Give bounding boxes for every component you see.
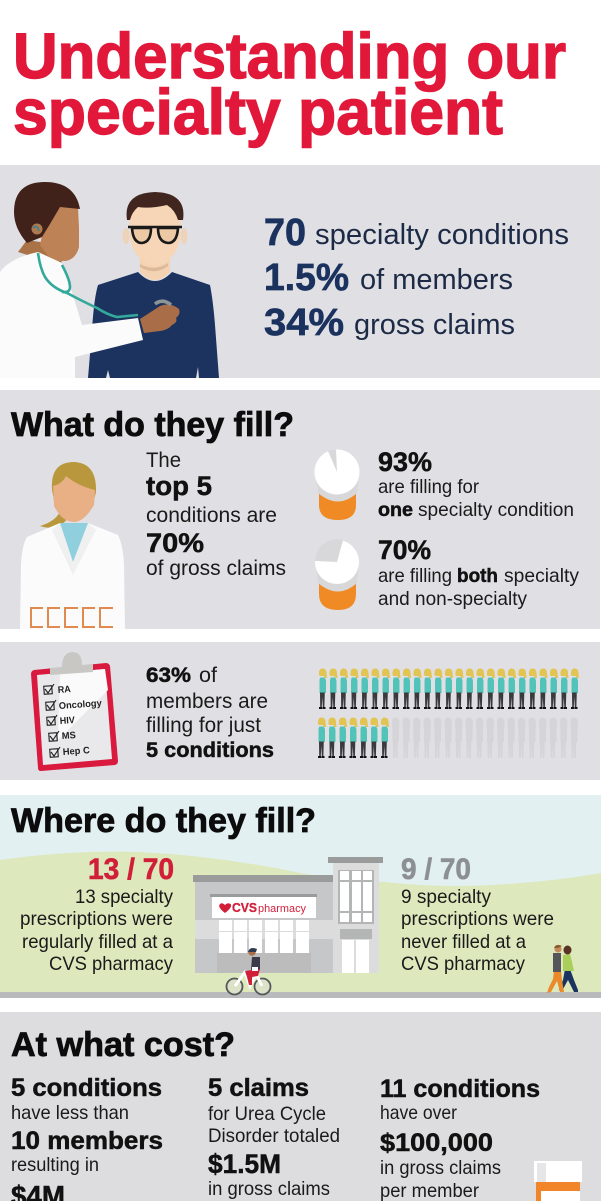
stat 13/70: prescriptions were: [20, 908, 173, 930]
stat 93%: one: [378, 499, 413, 521]
stats text: 1.5%: [264, 257, 349, 299]
top 5 text: of gross claims: [146, 557, 286, 580]
icon: doctor: [0, 182, 180, 378]
icon: clipboard checklist: [31, 652, 118, 771]
stat 13/70: 13 specialty: [75, 886, 173, 908]
panel: where do they fill: [0, 795, 601, 998]
stat 93%: [378, 447, 574, 521]
stat 70%: both: [457, 565, 498, 587]
top 5 text: top 5: [146, 471, 212, 501]
icon: clipboard checklist: Hep C: [62, 745, 90, 758]
column: 11 conditions: in gross claims: [380, 1157, 501, 1179]
63% text: members are: [146, 690, 268, 713]
icon: clipboard checklist: HIV: [59, 715, 76, 727]
column: 5 conditions: 5 conditions: [11, 1074, 162, 1102]
stat 9/70: CVS pharmacy: [401, 953, 525, 975]
title: Understanding our: [13, 20, 566, 92]
stats text: gross claims: [354, 309, 515, 341]
top 5 text: 70%: [146, 528, 204, 558]
column: 5 conditions: 10 members: [11, 1127, 163, 1155]
icon: pill bottle 70%: [315, 539, 359, 610]
stat 9/70: prescriptions were: [401, 908, 554, 930]
stat 13/70: [20, 853, 174, 975]
icon: pill bottle: [534, 1161, 582, 1201]
icon: CVS pharmacy store: pharmacy: [258, 903, 306, 915]
column: 5 claims: for Urea Cycle: [208, 1103, 326, 1125]
panel: patient overview: [0, 165, 600, 378]
icon: walking couple: [547, 945, 578, 993]
stat 70%: 70%: [378, 535, 431, 565]
chart: row of 25 people, all filled: [319, 668, 579, 709]
63% text: 63%: [146, 663, 191, 687]
stat 13/70: CVS pharmacy: [49, 953, 173, 975]
title: [13, 20, 566, 148]
stats text: specialty conditions: [315, 219, 569, 251]
stat 70%: are filling: [378, 565, 452, 587]
column: 5 conditions: resulting in: [11, 1154, 99, 1176]
63% text: filling for just: [146, 714, 261, 737]
icon: cyclist: [226, 948, 270, 994]
column: 5 conditions: [11, 1074, 163, 1201]
chart: row of 25 people, 7 filled: [318, 718, 578, 758]
column: 5 claims: 5 claims: [208, 1074, 309, 1102]
63% text: [146, 663, 274, 762]
icon: pill bottle 93%: [314, 450, 360, 520]
stats text: 70: [264, 212, 306, 254]
stat 9/70: never filled at a: [401, 931, 526, 953]
stat 70%: specialty: [504, 565, 579, 587]
column: 5 claims: in gross claims: [208, 1178, 330, 1200]
icon: clipboard checklist: MS: [61, 730, 76, 742]
63% text: 5 conditions: [146, 738, 274, 762]
column: 5 claims: Disorder totaled: [208, 1125, 340, 1147]
column: 5 claims: [208, 1074, 340, 1200]
stat 93%: are filling for: [378, 476, 479, 498]
icon: CVS pharmacy store: CVS: [232, 900, 257, 915]
column: 11 conditions: have over: [380, 1102, 457, 1124]
stat 13/70: regularly filled at a: [22, 931, 173, 953]
title: specialty patient: [13, 76, 503, 148]
heading: Where do they fill?: [11, 802, 316, 840]
stat 93%: specialty condition: [418, 499, 574, 521]
panel: 63% of members: [0, 642, 600, 780]
icon: patient: [88, 192, 219, 378]
63% text: of: [199, 664, 217, 687]
icon: clipboard checklist: Oncology: [58, 698, 103, 712]
column: 5 claims: $1.5M: [208, 1149, 281, 1179]
heading: What do they fill?: [11, 406, 294, 444]
panel: what do they fill: [0, 390, 600, 629]
stat 9/70: 9 / 70: [401, 853, 471, 886]
stats text: of members: [360, 264, 513, 296]
icon: clipboard checklist: RA: [57, 684, 71, 696]
stat 9/70: [401, 853, 554, 975]
stats text: 34%: [264, 302, 344, 344]
column: 5 conditions: have less than: [11, 1102, 129, 1124]
stat 70%: and non-specialty: [378, 588, 527, 610]
stats text: [264, 212, 569, 344]
column: 11 conditions: 11 conditions: [380, 1075, 540, 1103]
stat 13/70: 13 / 70: [88, 853, 174, 886]
top 5 text: [146, 449, 286, 580]
top 5 text: conditions are: [146, 504, 277, 527]
panel: at what cost: [0, 1012, 601, 1201]
icon: pharmacist: [20, 462, 125, 629]
column: 11 conditions: [380, 1075, 540, 1201]
stat 9/70: 9 specialty: [401, 886, 491, 908]
heading: At what cost?: [11, 1026, 235, 1064]
top 5 text: The: [146, 449, 181, 472]
column: 11 conditions: $100,000: [380, 1129, 493, 1157]
stat 93%: 93%: [378, 447, 432, 477]
icon: CVS pharmacy store: [193, 857, 383, 973]
stat 70%: [378, 535, 579, 610]
